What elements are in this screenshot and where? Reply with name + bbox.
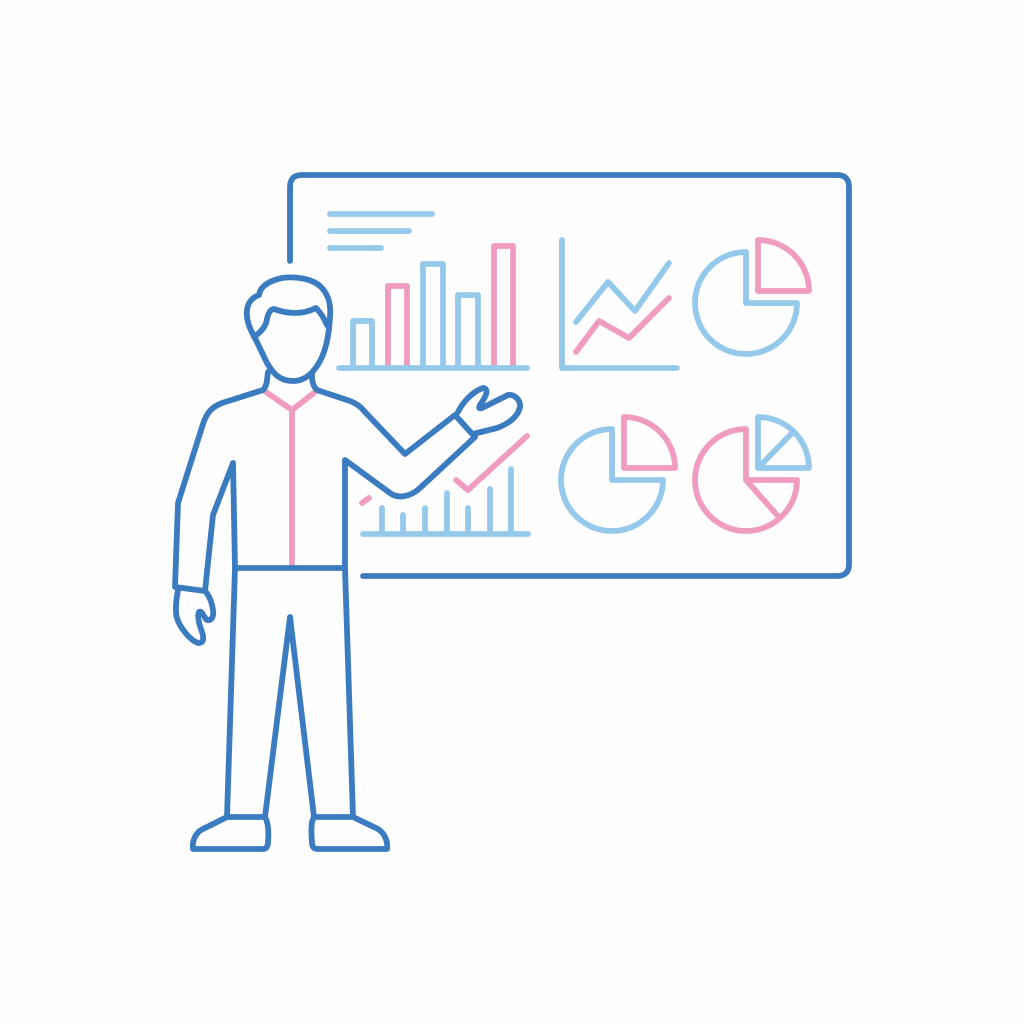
pie body (695, 252, 797, 354)
pie body (695, 429, 797, 531)
pie chart bottom middle (561, 417, 675, 531)
pie chart bottom right (695, 417, 809, 531)
pie chart top right (695, 240, 809, 354)
text block: placeholder lines (330, 214, 432, 248)
hairline (254, 308, 327, 337)
bar 5 (494, 246, 513, 367)
pink dash (362, 498, 369, 503)
line chart axes (562, 240, 677, 368)
pink trend check (456, 436, 527, 490)
pie inner slice divider (746, 480, 777, 515)
blue trend line (576, 263, 669, 322)
left hand (176, 590, 213, 643)
panel: presentation board outline (290, 175, 849, 576)
pink trend line (576, 298, 669, 352)
bar 4 (458, 295, 478, 367)
bar chart (339, 246, 527, 368)
small bar and trend chart (362, 436, 528, 534)
waistline (235, 565, 345, 571)
left shoe (193, 817, 268, 849)
bar 1 (353, 321, 372, 367)
figure: presenter (175, 277, 520, 849)
pie detached slice (758, 417, 809, 468)
bar chart axis (339, 365, 527, 371)
axis (363, 531, 528, 537)
neck and torso with pointing arm (175, 372, 475, 817)
cuff and pointing hand (458, 388, 520, 434)
line chart (562, 240, 677, 368)
right shoe (311, 817, 387, 849)
trousers inner legs (265, 617, 314, 817)
bar 3 (423, 264, 443, 367)
head and hair (247, 277, 330, 381)
pie body (561, 429, 663, 531)
pie detached slice (624, 417, 675, 468)
pie detached slice (758, 240, 809, 291)
detached slice divider (758, 432, 793, 468)
ticks (382, 469, 511, 533)
shirt placket and collar (266, 392, 315, 567)
bar 2 (388, 286, 407, 367)
